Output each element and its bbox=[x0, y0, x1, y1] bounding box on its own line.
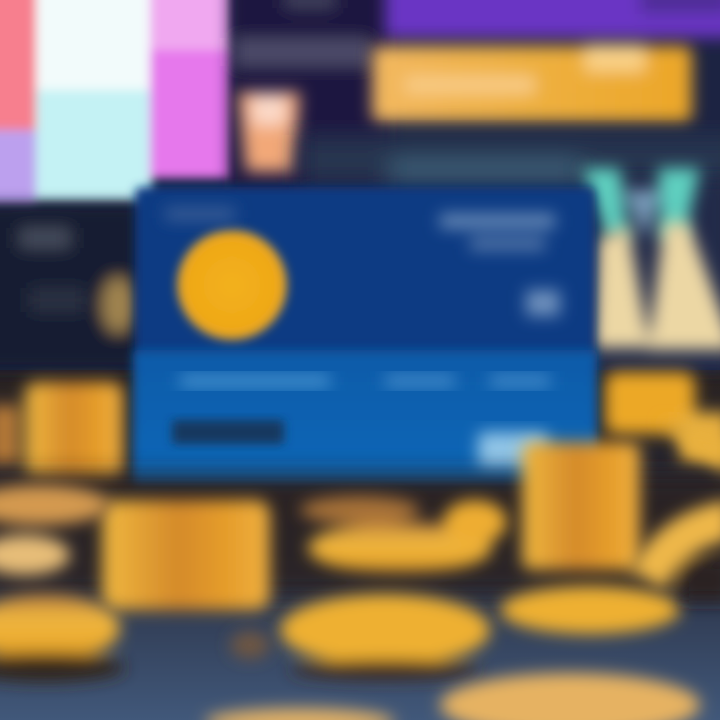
teal spikes bbox=[582, 168, 700, 240]
top purple band bbox=[385, 0, 720, 38]
coins far left bbox=[0, 485, 125, 682]
dark gaps between coins bbox=[0, 475, 720, 595]
top dark panel bbox=[230, 0, 390, 190]
cream shapes bbox=[594, 222, 720, 350]
gold banner bbox=[372, 44, 692, 122]
top-left colour stripes bbox=[0, 0, 232, 205]
card top bbox=[135, 187, 595, 357]
coins far right bbox=[630, 420, 720, 600]
bottom coins bbox=[205, 631, 700, 720]
credit card bbox=[133, 187, 597, 485]
slate band behind card bbox=[300, 135, 720, 185]
card top text marks bbox=[165, 208, 560, 316]
gold chip circle bbox=[177, 230, 287, 340]
card logo bbox=[478, 432, 548, 468]
foreground gold coins bbox=[0, 420, 720, 720]
card name bar bbox=[172, 420, 284, 444]
card number marks bbox=[180, 375, 550, 387]
background gold coins bbox=[0, 372, 720, 480]
right panel with teal spikes and cream shapes bbox=[582, 168, 720, 370]
left dark panel bbox=[0, 205, 140, 370]
coin stack lower right bbox=[500, 442, 680, 634]
cup icon bbox=[238, 92, 300, 172]
center coins bbox=[280, 496, 507, 680]
card bottom bbox=[133, 350, 597, 485]
coin stack lower left bbox=[102, 500, 270, 610]
